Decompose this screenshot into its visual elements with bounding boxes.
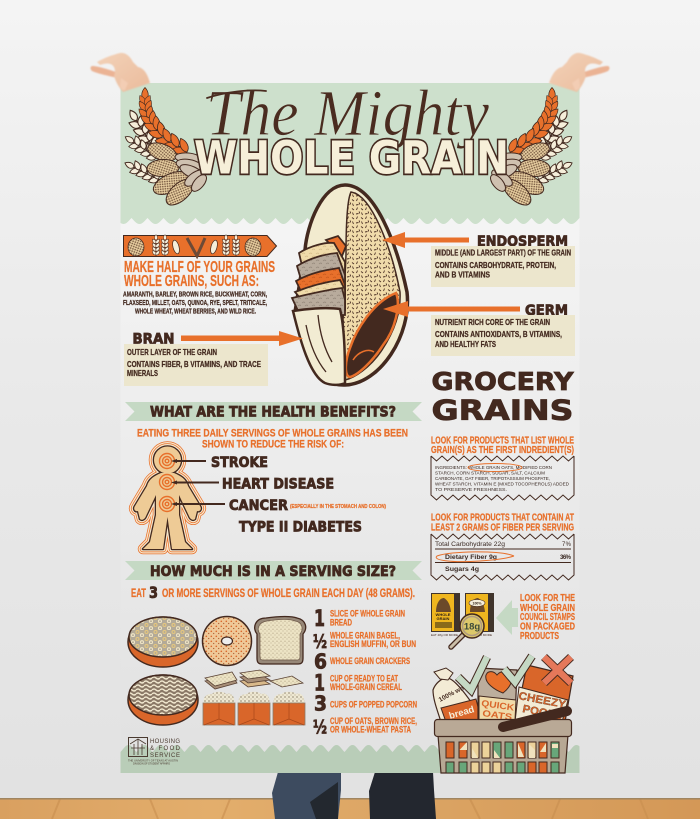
nutrition label: 7%: [562, 542, 572, 548]
endosperm: [343, 192, 400, 380]
text: risk intro: SHOWN TO REDUCE THE RISK OF:: [202, 438, 344, 450]
label: bran: BRAN: [132, 332, 174, 348]
text: council stamps: LOOK FOR THE: [520, 593, 575, 604]
oats box: [478, 668, 517, 722]
grain list: AMARANTH, BARLEY, BROWN RICE, BUCKWHEAT, CORN,: [123, 290, 267, 298]
risk: cancer: (ESPECIALLY IN THE STOMACH AND COLON): [290, 504, 386, 510]
whole grain stamps: EAT 48g OR MORE: [465, 633, 492, 637]
grain list: [123, 290, 267, 316]
serving list: ENGLISH MUFFIN, OR BUN: [330, 639, 416, 649]
logo: housing and food service: HOUSING: [150, 739, 180, 745]
nutrition label: Total Carbohydrate 22g: [435, 542, 505, 548]
logo: housing and food service: SERVICE: [150, 753, 180, 759]
whole grain stamps: [431, 593, 494, 637]
arrow: bran: [181, 331, 303, 346]
footer green band: [120, 745, 584, 773]
logo: housing and food service: DIVISION OF STUDENT AFFAIRS: [133, 762, 170, 766]
serving list: BREAD: [330, 618, 352, 628]
left hand: [90, 53, 150, 92]
bowl of cereal: [128, 617, 198, 667]
oats box: OATS: [482, 708, 513, 722]
basket handle: [503, 711, 567, 727]
text: council stamps: WHOLE GRAIN: [520, 603, 575, 614]
shopping basket: [433, 656, 573, 773]
text: eat 3: EAT: [131, 588, 146, 600]
box: germ: AND HEALTHY FATS: [435, 339, 496, 349]
ingredient label: CARBONATE, OAT FIBER, TRIPOTASSIUM PHOSPATE,: [435, 476, 550, 482]
risk: cancer: [171, 498, 386, 514]
whole grain stamps: WHOLE: [436, 612, 451, 617]
serving list: CUPS OF POPPED POPCORN: [330, 700, 417, 710]
nutrition label: [431, 534, 574, 580]
right wheat wing: [488, 88, 576, 210]
banner with grains: [124, 235, 276, 256]
magnifying glass: 18g: [464, 622, 480, 632]
nutrition label: 36%: [560, 555, 572, 561]
heading: grocery grains: GROCERY: [432, 367, 574, 396]
cheezy box: CHEEZY: [517, 690, 568, 711]
text: council stamps: COUNCIL STAMPS: [520, 612, 575, 623]
serving list: ½: [313, 716, 327, 738]
magnifying glass: [451, 614, 484, 647]
box: bran: OUTER LAYER OF THE GRAIN: [127, 347, 217, 357]
box: endosperm: AND B VITAMINS: [435, 270, 490, 280]
box: germ: CONTAINS ANTIOXIDANTS, B VITAMINS,: [435, 329, 562, 339]
box: bran: MINERALS: [127, 368, 158, 378]
bread slice: [255, 616, 306, 664]
text: ingredient tip: LOOK FOR PRODUCTS THAT LIST WHOLE: [431, 434, 574, 446]
text: risk intro: EATING THREE DAILY SERVINGS OF WHOLE GRAINS HAS BEEN: [137, 428, 408, 440]
risk: heart disease: [171, 476, 334, 492]
arrow: stamps: [496, 600, 518, 635]
ingredient label: STARCH, CORN STARCH, SUGAR, SALT, CALCIUM: [435, 470, 545, 476]
risk: stroke: STROKE: [211, 455, 268, 471]
serving list: [313, 607, 417, 738]
serving list: SLICE OF WHOLE GRAIN: [330, 608, 405, 618]
serving list: WHOLE GRAIN BAGEL,: [330, 630, 400, 640]
ingredient label: WHEAT STARCH, VITAMIN E (MIXED TOCOPHEROLS) ADDED: [435, 482, 570, 488]
oats box: QUICK: [481, 698, 515, 713]
label: germ: GERM: [525, 303, 568, 319]
arrow: germ: [383, 301, 520, 317]
text: council stamps: PRODUCTS: [520, 631, 559, 642]
risk: heart disease: HEART DISEASE: [222, 476, 334, 492]
box: endosperm: CONTAINS CARBOHYDRATE, PROTEIN,: [435, 260, 556, 270]
text: council stamps: ON PACKAGED: [520, 622, 575, 632]
box: endosperm: MIDDLE (AND LARGEST PART) OF THE GRAIN: [435, 248, 571, 258]
whole grain stamps: GRAIN: [437, 616, 450, 621]
text: eat 3: [131, 583, 415, 602]
ingredient label: TO PRESERVE FRESHNESS.: [435, 487, 507, 493]
basket rim: [434, 720, 572, 736]
grain diagram: [292, 185, 408, 385]
crackers: [205, 670, 303, 689]
human figure: [134, 446, 201, 549]
serving list: CUP OF READY TO EAT: [330, 674, 398, 684]
left wheat wing: [121, 88, 209, 210]
bagel: [202, 616, 252, 666]
text: fiber tip: [431, 512, 574, 534]
text: fiber tip: LOOK FOR PRODUCTS THAT CONTAIN AT: [431, 512, 574, 524]
box: endosperm: [431, 246, 575, 287]
logo: housing and food service: & FOOD: [150, 746, 181, 752]
nutrition label: Dietary Fiber 9g: [445, 555, 497, 561]
cheezy box: [515, 665, 573, 723]
text: council stamps: [520, 593, 575, 642]
risk: type ii diabetes: TYPE II DIABETES: [239, 520, 362, 536]
serving list: WHOLE GRAIN CRACKERS: [330, 656, 410, 666]
cheezy box: POOFS: [521, 703, 563, 723]
heading: make half: WHOLE GRAINS, SUCH AS:: [124, 273, 259, 290]
right hand: [549, 53, 610, 92]
bread bag: [433, 668, 480, 722]
nutrition label: Sugars 4g: [445, 567, 479, 573]
text: ingredient tip: [431, 434, 574, 456]
heading: make half: [124, 259, 275, 290]
whole grain stamps: EAT 48g OR MORE: [431, 633, 458, 637]
grain list: WHOLE WHEAT, WHEAT BERRIES, AND WILD RICE.: [135, 306, 256, 316]
heading: grocery grains: [432, 367, 574, 426]
box: bran: [124, 344, 268, 386]
label: endosperm: ENDOSPERM: [477, 234, 568, 250]
serving list: 3: [314, 692, 327, 716]
grain list: FLAXSEED, MILLET, OATS, QUINOA, RYE, SPELT, TRITICALE,: [123, 298, 267, 307]
ingredient label: INGREDIENTS: WHOLE GRAIN OATS, MODIFIED CORN: [435, 465, 552, 471]
banner: health benefits: WHAT ARE THE HEALTH BENEFITS?: [150, 404, 396, 420]
text: ingredient tip: GRAIN(S) AS THE FIRST INDREDIENT(S): [431, 444, 574, 456]
red cross: [544, 657, 571, 683]
title: The Mighty: The Mighty: [206, 77, 490, 150]
bread bag: 100% whole: [438, 680, 474, 704]
serving list: ½: [313, 631, 327, 653]
bowl of pasta: [128, 675, 198, 725]
text: eat 3: OR MORE SERVINGS OF WHOLE GRAIN EACH DAY (48 GRAMS).: [162, 588, 415, 600]
logo: housing and food service: THE UNIVERSITY OF TEXAS AT AUSTIN: [128, 758, 178, 762]
serving list: 1: [314, 607, 325, 632]
risk: cancer: CANCER: [229, 498, 288, 514]
green check: [504, 656, 532, 682]
poster sheet: [120, 83, 580, 773]
serving list: CUP OF OATS, BROWN RICE,: [330, 716, 417, 726]
risk: stroke: [171, 455, 268, 471]
bread bag: bread: [448, 704, 476, 722]
serving list: WHOLE-GRAIN CEREAL: [330, 682, 402, 692]
text: risk intro: [137, 428, 408, 450]
box: bran: CONTAINS FIBER, B VITAMINS, AND TRACE: [127, 359, 261, 369]
title: Whole Grain: WHOLE GRAIN: [194, 132, 509, 184]
text: eat 3: 3: [149, 583, 158, 602]
ingredient label: [431, 456, 574, 500]
basket body: [438, 735, 568, 773]
jeans legs: [272, 772, 436, 819]
serving list: 6: [314, 650, 327, 674]
bran layers: [292, 236, 346, 385]
germ: [346, 293, 398, 377]
arrow: endosperm: [382, 232, 469, 248]
banner: serving size: HOW MUCH IS IN A SERVING SIZE?: [150, 564, 396, 580]
popcorn bags: [203, 692, 305, 725]
heading: make half: MAKE HALF OF YOUR GRAINS: [124, 259, 275, 276]
box: germ: [431, 315, 575, 356]
logo: housing and food service: [128, 738, 181, 766]
wooden floor: [0, 798, 700, 819]
whole grain stamps: 100%: [473, 602, 482, 606]
green check: [458, 657, 487, 690]
text: fiber tip: LEAST 2 GRAMS OF FIBER PER SERVING: [431, 522, 574, 534]
serving list: OR WHOLE-WHEAT PASTA: [330, 724, 411, 734]
serving list: 1: [314, 672, 325, 696]
heading: grocery grains: GRAINS: [432, 394, 574, 426]
box: germ: NUTRIENT RICH CORE OF THE GRAIN: [435, 317, 550, 327]
header green band: [116, 83, 580, 224]
